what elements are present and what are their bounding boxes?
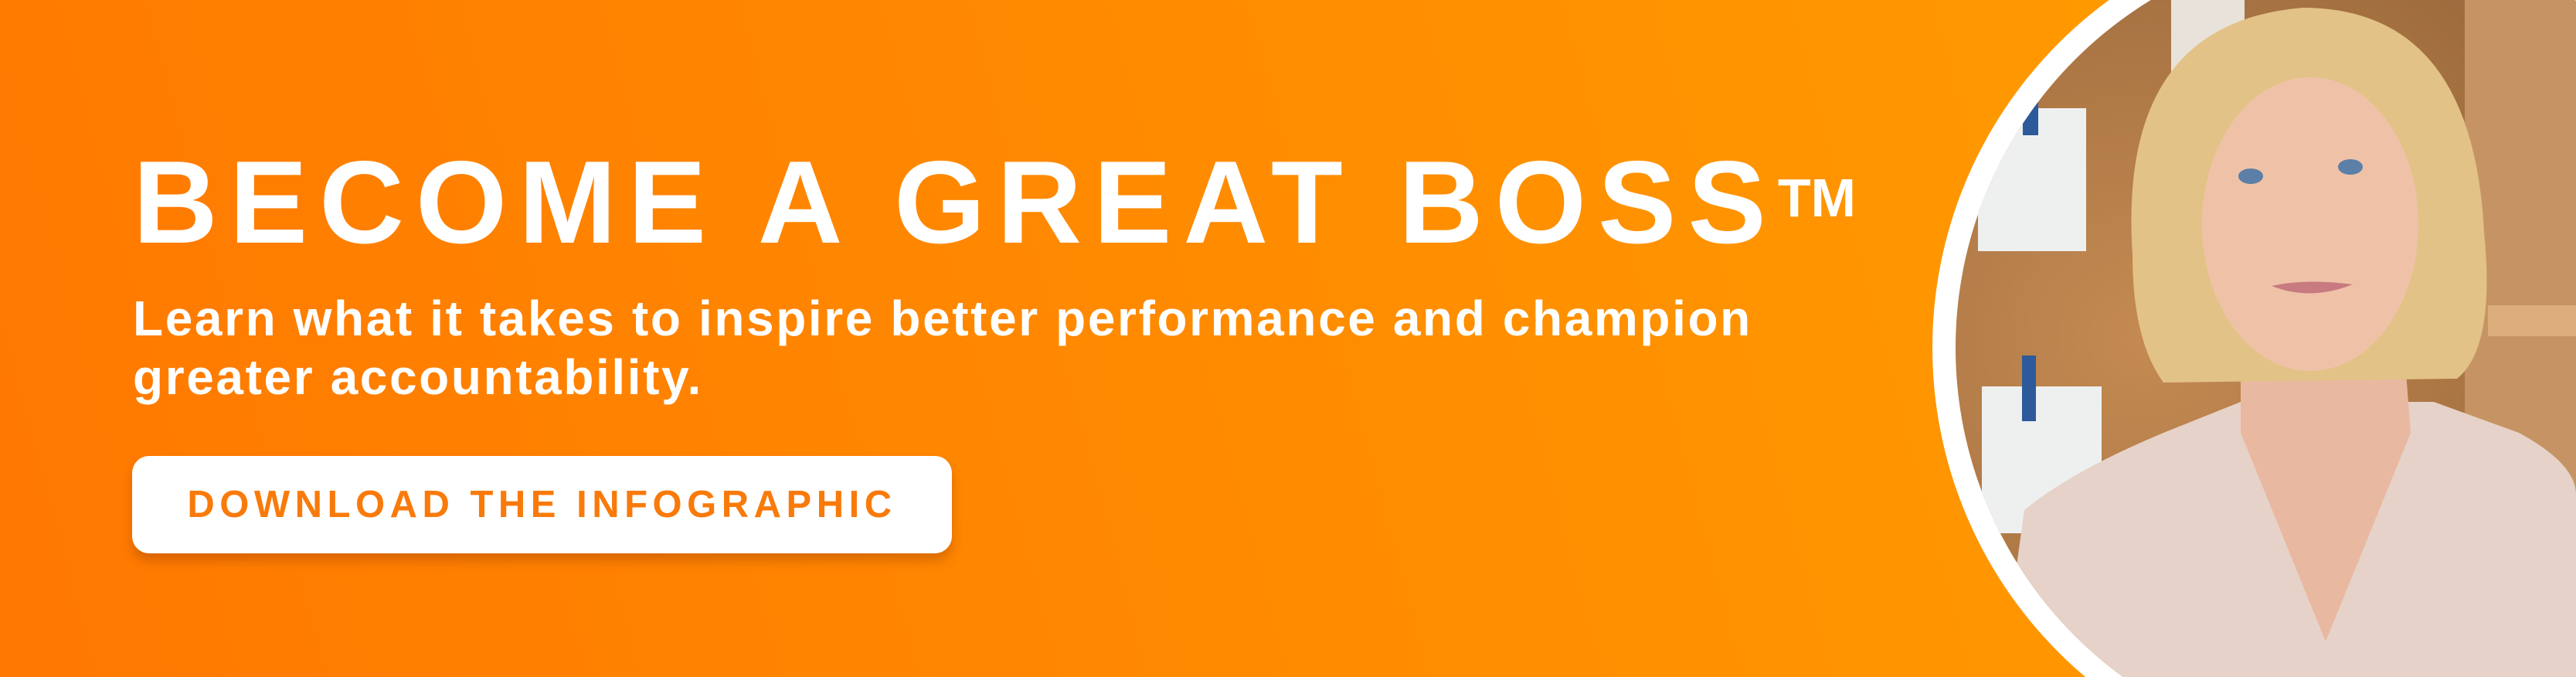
neck (2241, 379, 2411, 641)
title: BECOME A GREAT BOSSTM (133, 137, 1856, 268)
button: download (132, 456, 952, 553)
shelves (2465, 0, 2576, 493)
subtitle text: greater accountability. (133, 349, 703, 405)
papers (1978, 108, 2086, 251)
hair (2131, 8, 2486, 383)
face (2202, 77, 2418, 371)
button: download: DOWNLOAD THE INFOGRAPHIC (187, 484, 897, 526)
background cork board (1956, 0, 2576, 677)
photo circle (1932, 0, 2576, 677)
subtitle text: Learn what it takes to inspire better performance and champion (133, 291, 1752, 346)
subtitle text (133, 291, 1752, 405)
blouse (2001, 402, 2576, 677)
